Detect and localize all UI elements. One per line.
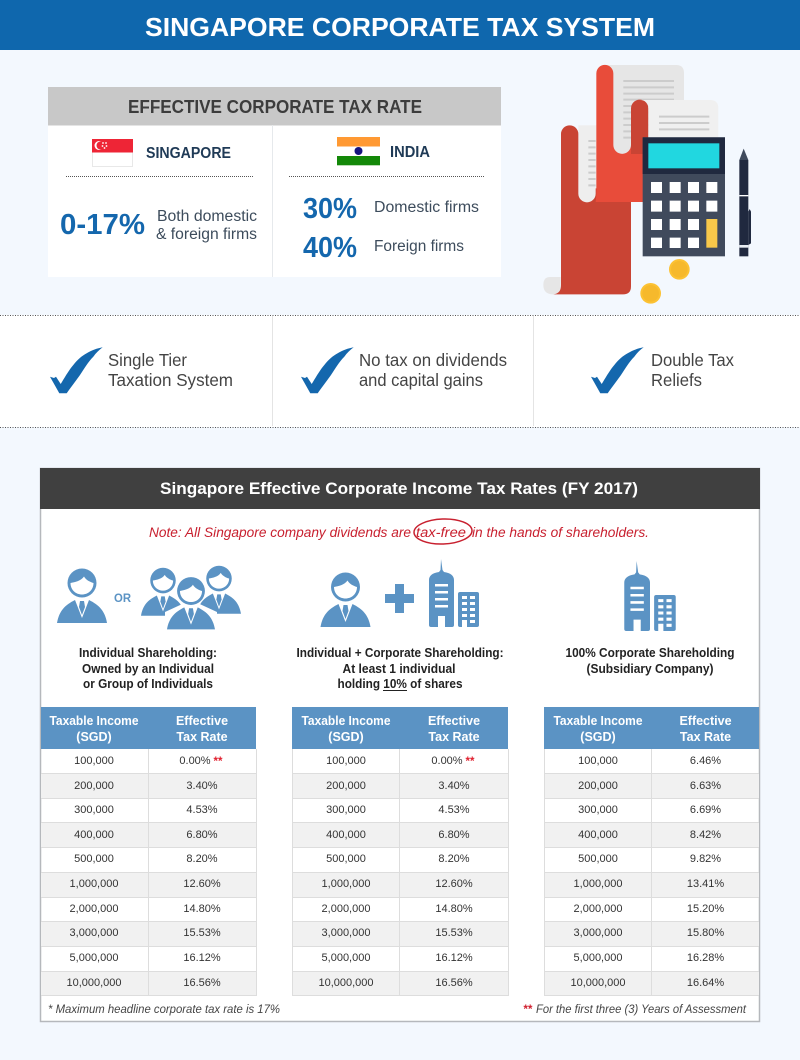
table: individual shareholding rates: 16.12%	[183, 952, 221, 964]
table: corporate shareholding rates: Taxable Income	[554, 714, 643, 728]
table: individual shareholding rates: 2,000,000	[70, 903, 118, 915]
benefit: single tier taxation: Taxation System	[108, 370, 233, 390]
table: corporate shareholding rates: Effective	[679, 714, 732, 728]
footnote: first three years of assessment: For the first three (3) Years of Assessment	[536, 1004, 747, 1016]
table: corporate shareholding rates: 15.20%	[687, 903, 724, 915]
title banner: SINGAPORE CORPORATE TAX SYSTEM	[145, 12, 655, 42]
table: corporate shareholding rates: 9.82%	[690, 853, 721, 865]
table: corporate shareholding rates: 10,000,000	[570, 977, 626, 989]
table: individual shareholding rates: 14.80%	[183, 903, 221, 915]
card heading	[40, 468, 760, 509]
icon: individual or group of individuals	[57, 566, 241, 632]
table: corporate shareholding rates: 5,000,000	[574, 952, 622, 964]
table: individual plus corporate shareholding rates: 5,000,000	[322, 952, 370, 964]
table: individual shareholding rates: 3.40%	[186, 780, 218, 792]
benefit: no tax on dividends and capital gains: and capital gains	[359, 370, 483, 390]
table: individual shareholding rates: (SGD)	[76, 730, 112, 744]
table: individual shareholding rates: 12.60%	[183, 878, 221, 890]
benefit: no tax on dividends and capital gains	[301, 347, 507, 393]
table: corporate shareholding rates	[544, 707, 759, 996]
Singapore rate: Both domestic	[157, 208, 257, 225]
table: corporate shareholding rates: 500,000	[578, 853, 618, 865]
table: corporate shareholding rates: 2,000,000	[574, 903, 622, 915]
table: corporate shareholding rates: 15.80%	[687, 927, 724, 939]
icon: individual or group of individuals: OR	[114, 591, 131, 605]
benefit: double tax reliefs: Double Tax	[651, 350, 734, 370]
table: individual shareholding rates: 200,000	[74, 780, 114, 792]
table: corporate shareholding rates: 200,000	[578, 780, 618, 792]
table: individual plus corporate shareholding rates: 3.40%	[438, 780, 470, 792]
table: corporate shareholding rates: 3,000,000	[574, 927, 622, 939]
caption: individual plus corporate shareholding: At least 1 individual	[342, 662, 456, 676]
heading: effective corporate tax rate: EFFECTIVE CORPORATE TAX RATE	[128, 96, 422, 117]
table: corporate shareholding rates: 6.63%	[690, 780, 721, 792]
table: individual plus corporate shareholding rates: 6.80%	[438, 829, 470, 841]
table: individual plus corporate shareholding rates: 0.00%	[431, 755, 463, 767]
table: individual plus corporate shareholding rates: **	[466, 756, 475, 768]
icon: India flag	[337, 137, 380, 165]
table: corporate shareholding rates: 13.41%	[687, 878, 724, 890]
table: individual plus corporate shareholding rates: Tax Rate	[428, 730, 480, 744]
Singapore rate: 0-17%	[60, 209, 145, 241]
table: corporate shareholding rates: 6.46%	[690, 755, 721, 767]
caption: individual plus corporate shareholding: Individual + Corporate Shareholding:	[296, 646, 504, 660]
benefit: single tier taxation: Single Tier	[108, 350, 187, 370]
table: corporate shareholding rates: 16.64%	[687, 977, 724, 989]
table: corporate shareholding rates: Tax Rate	[680, 730, 731, 744]
illustration: receipts, calculator, pen and coins	[543, 65, 751, 304]
caption: individual shareholding: Individual Shareholding:	[79, 646, 217, 660]
caption: individual plus corporate shareholding	[296, 646, 504, 691]
table: individual shareholding rates: 300,000	[74, 804, 114, 816]
note about tax-free dividends: in the hands of shareholders.	[472, 525, 649, 540]
India foreign rate	[303, 232, 464, 264]
table: corporate shareholding rates: 16.28%	[687, 952, 724, 964]
panel: effective corporate tax rate	[48, 87, 501, 277]
table: individual plus corporate shareholding rates: 16.56%	[435, 977, 473, 989]
table: individual shareholding rates	[41, 707, 256, 996]
India domestic rate: 30%	[303, 193, 357, 225]
icon: corporate buildings	[624, 561, 676, 631]
table: individual plus corporate shareholding rates: 200,000	[326, 780, 366, 792]
table: corporate shareholding rates: 1,000,000	[574, 878, 622, 890]
benefit: double tax reliefs	[591, 347, 734, 393]
table: individual plus corporate shareholding rates: 10,000,000	[318, 977, 374, 989]
table: individual plus corporate shareholding rates: 1,000,000	[322, 878, 370, 890]
table: individual plus corporate shareholding rates: 2,000,000	[322, 903, 370, 915]
table: individual shareholding rates: 10,000,000	[66, 977, 122, 989]
table: individual shareholding rates: Taxable Income	[50, 714, 139, 728]
table: individual shareholding rates: 1,000,000	[70, 878, 118, 890]
table: individual shareholding rates: 0.00%	[179, 755, 211, 767]
table: individual shareholding rates: 3,000,000	[70, 927, 118, 939]
table: individual plus corporate shareholding rates: 14.80%	[435, 903, 473, 915]
table: individual plus corporate shareholding rates: Taxable Income	[302, 714, 391, 728]
table: individual shareholding rates: 100,000	[74, 755, 114, 767]
table: individual plus corporate shareholding rates: 100,000	[326, 755, 366, 767]
table: corporate shareholding rates: 6.69%	[690, 804, 721, 816]
Singapore rate: & foreign firms	[156, 226, 257, 243]
table: individual plus corporate shareholding rates: 15.53%	[435, 927, 473, 939]
benefit: no tax on dividends and capital gains: No tax on dividends	[359, 350, 507, 370]
table: individual shareholding rates: 8.20%	[186, 853, 218, 865]
table: individual plus corporate shareholding rates: 12.60%	[435, 878, 473, 890]
note about tax-free dividends: Note: All Singapore company dividends are	[149, 525, 411, 540]
table: individual shareholding rates: 500,000	[74, 853, 114, 865]
table: individual plus corporate shareholding rates: 4.53%	[438, 804, 470, 816]
table: individual shareholding rates: Tax Rate	[176, 730, 228, 744]
table: corporate shareholding rates: 100,000	[578, 755, 618, 767]
table: individual plus corporate shareholding rates: 3,000,000	[322, 927, 370, 939]
table: individual plus corporate shareholding rates: Effective	[428, 714, 480, 728]
note about tax-free dividends	[149, 518, 649, 545]
table: corporate shareholding rates: 400,000	[578, 829, 618, 841]
icon: Singapore flag	[92, 139, 133, 166]
footnote: maximum headline rate: * Maximum headline corporate tax rate is 17%	[48, 1004, 280, 1016]
card heading: Singapore Effective Corporate Income Tax Rates (FY 2017)	[160, 479, 638, 498]
table: individual shareholding rates: 4.53%	[186, 804, 218, 816]
title banner	[0, 0, 800, 50]
table: individual shareholding rates: 400,000	[74, 829, 114, 841]
Singapore label: SINGAPORE	[146, 145, 231, 162]
panel: effective corporate income tax rates	[40, 468, 760, 1022]
India domestic rate	[303, 193, 479, 225]
table: individual plus corporate shareholding rates: 8.20%	[438, 853, 470, 865]
table: corporate shareholding rates: (SGD)	[580, 730, 616, 744]
Singapore rate	[60, 208, 257, 243]
caption: corporate shareholding: (Subsidiary Company)	[586, 662, 714, 676]
footnote: first three years of assessment: **	[523, 1004, 532, 1016]
icon: individual plus corporate	[320, 559, 479, 627]
panel: tax benefits strip	[0, 315, 800, 428]
caption: corporate shareholding	[566, 646, 734, 676]
caption: individual shareholding: Owned by an Individual	[82, 662, 214, 676]
table: individual shareholding rates: Effective	[176, 714, 228, 728]
benefit: double tax reliefs: Reliefs	[651, 370, 702, 390]
caption: corporate shareholding: 100% Corporate Shareholding	[566, 646, 734, 660]
table: individual shareholding rates: 15.53%	[183, 927, 221, 939]
benefit: single tier taxation	[50, 347, 233, 393]
caption: individual shareholding: or Group of Individuals	[83, 677, 213, 691]
India label: INDIA	[390, 144, 430, 161]
caption: individual shareholding	[79, 646, 217, 691]
table: individual plus corporate shareholding rates: 500,000	[326, 853, 366, 865]
table: individual shareholding rates: **	[214, 756, 223, 768]
India domestic rate: Domestic firms	[374, 199, 479, 216]
table: individual shareholding rates: 6.80%	[186, 829, 218, 841]
note about tax-free dividends: tax-free	[416, 525, 466, 540]
India foreign rate: Foreign firms	[374, 238, 464, 255]
table: individual plus corporate shareholding rates: 16.12%	[435, 952, 473, 964]
caption: individual plus corporate shareholding: holding 10% of shares	[338, 677, 463, 691]
table: corporate shareholding rates: 300,000	[578, 804, 618, 816]
table: individual plus corporate shareholding rates: 400,000	[326, 829, 366, 841]
India foreign rate: 40%	[303, 232, 357, 264]
table: individual shareholding rates: 5,000,000	[70, 952, 118, 964]
table: corporate shareholding rates: 8.42%	[690, 829, 721, 841]
table: individual plus corporate shareholding rates	[292, 707, 508, 996]
table: individual plus corporate shareholding rates: 300,000	[326, 804, 366, 816]
table: individual shareholding rates: 16.56%	[183, 977, 221, 989]
table: individual plus corporate shareholding rates: (SGD)	[328, 730, 364, 744]
